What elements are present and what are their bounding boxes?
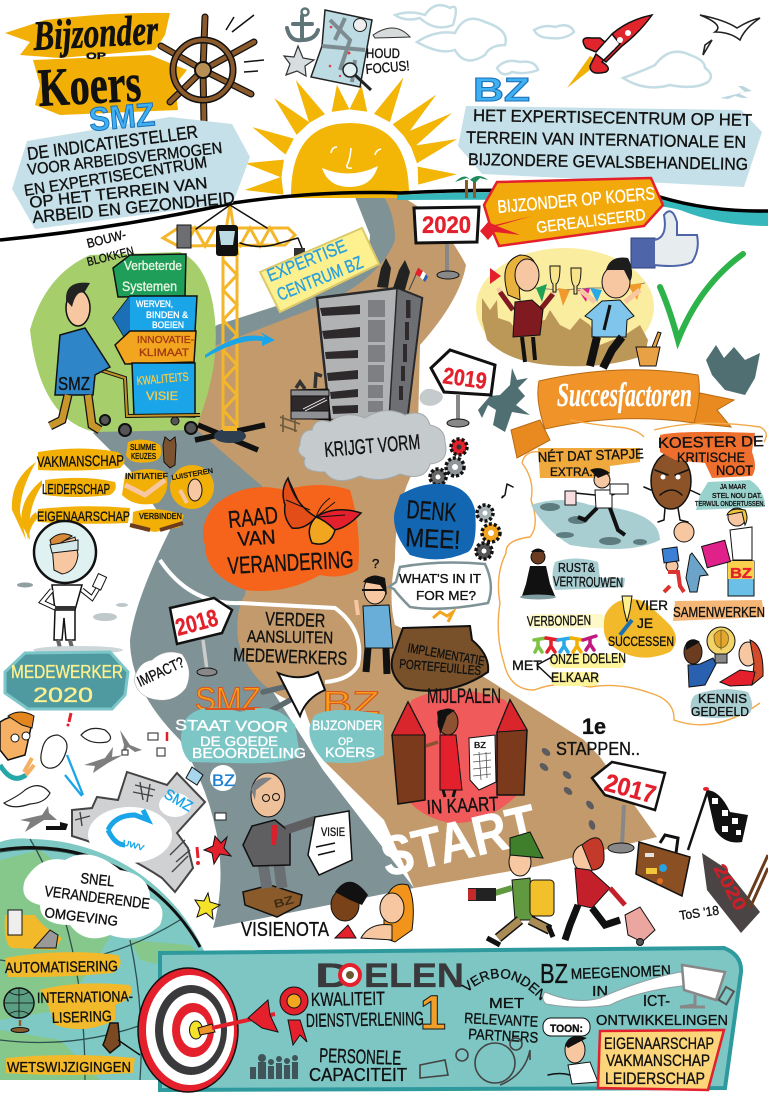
icon: computer bbox=[680, 965, 734, 1007]
yellow pill: leiderschap bbox=[42, 478, 116, 498]
milestone towers bbox=[392, 700, 527, 804]
icon: ship wheel bbox=[161, 15, 264, 123]
icon: gears top bbox=[430, 439, 467, 485]
pill: automatisering bbox=[5, 910, 121, 977]
panel: SMZ statement: STAAT VOOR bbox=[175, 717, 288, 736]
samenwerken figures: BZ bbox=[730, 565, 752, 582]
icon: butterfly bbox=[283, 478, 361, 544]
brown road bbox=[195, 196, 657, 888]
goal: kwaliteit dienstverlening bbox=[306, 989, 424, 1032]
man with cart: SMZ bbox=[58, 374, 90, 394]
bubble: whats in it for me: WHAT'S IN IT bbox=[399, 571, 481, 586]
blob: raad van verandering: RAAD bbox=[227, 502, 279, 534]
icon: suitcase bbox=[636, 835, 690, 896]
icon: checkered flag bbox=[688, 787, 748, 850]
block: werven binden boeien: BINDEN & bbox=[146, 310, 188, 320]
crowd in party bbox=[482, 298, 648, 366]
heading: mijlpalen: MIJLPALEN bbox=[427, 685, 501, 708]
blob: raad van verandering: VERANDERING bbox=[227, 546, 354, 580]
blob: raad van verandering bbox=[203, 478, 361, 591]
mijlpalen circle bbox=[394, 690, 524, 823]
block: kwaliteitsvisie bbox=[132, 363, 195, 417]
small cloud near 2019 bbox=[420, 389, 443, 406]
text: 1e stappen: 1e bbox=[582, 714, 606, 739]
visie man: BZ bbox=[273, 894, 295, 911]
panel: SMZ description: EN EXPERTISECENTRUM bbox=[23, 154, 208, 200]
hiker with camera bbox=[468, 832, 554, 945]
grey road bbox=[93, 197, 414, 928]
text: met onze doelen elkaar bbox=[512, 650, 626, 686]
block: kwaliteitsvisie: VISIE bbox=[146, 389, 178, 403]
cloud: krijgt vorm bbox=[298, 411, 446, 481]
panel: BZ description: BIJZONDERE GEVALSBEHANDELING bbox=[468, 150, 748, 174]
icon: thumbs up bbox=[631, 211, 698, 268]
yellow pill: leiderschap: LEIDERSCHAP bbox=[42, 481, 110, 498]
pill: automatisering: AUTOMATISERING bbox=[5, 958, 118, 977]
blob: denk mee: MEE! bbox=[405, 522, 461, 555]
walnut character bbox=[644, 453, 705, 522]
blob: slimme keuzes bbox=[126, 440, 161, 463]
signature: ToS '18 bbox=[678, 903, 720, 923]
arrow: to 2020 bbox=[480, 216, 532, 240]
block: kwaliteitsvisie: KWALITEITS bbox=[136, 370, 189, 388]
icon: gavel bbox=[103, 1023, 140, 1055]
icon: captain hat bbox=[373, 28, 410, 38]
panel: BZ description: HET EXPERTISECENTRUM OP HET bbox=[473, 106, 752, 130]
sign: expertise centrum bz bbox=[260, 228, 379, 312]
woman with calendar bbox=[426, 709, 496, 797]
sign: 2017 bbox=[592, 762, 665, 853]
success factor: rust en vertrouwen: VERTROUWEN bbox=[553, 573, 623, 590]
goal: BZ meegenomen in ict bbox=[540, 958, 728, 1029]
samenwerken figures bbox=[662, 508, 754, 596]
text: houd focus: HOUD bbox=[366, 45, 400, 61]
yellow arrows bbox=[12, 462, 42, 540]
panel: SMZ statement: BEOORDELING bbox=[192, 745, 306, 762]
success factor: net dat stapje extra bbox=[538, 445, 644, 479]
icon: palm trees bbox=[455, 176, 488, 198]
blob: verbinden bbox=[130, 509, 184, 532]
success factor: koester de kritische noot bbox=[658, 432, 764, 478]
UWV buildings bbox=[46, 767, 205, 892]
small clouds and planes bbox=[4, 728, 226, 865]
banner: bijzonder op koers gerealiseerd: BIJZONDER OP KOERS bbox=[497, 183, 656, 217]
goal: verbonden met relevante partners: VERBONDEN bbox=[461, 968, 543, 1000]
white hand arm bbox=[543, 972, 690, 1007]
crowd silhouette right bbox=[706, 345, 760, 395]
sign: 2020: 2020 bbox=[422, 212, 471, 239]
panel: SMZ statement: DE GOEDE bbox=[200, 733, 278, 749]
block: werven binden boeien bbox=[113, 296, 197, 338]
block: innovatieklimaat: INNOVATIE- bbox=[137, 335, 194, 346]
globe bbox=[0, 838, 205, 1080]
icon: people silhouettes bbox=[250, 1054, 298, 1079]
text: met onze doelen elkaar: MET bbox=[512, 657, 542, 673]
badge: BZ blue bbox=[210, 765, 236, 791]
icon: plug bbox=[263, 672, 325, 716]
man with glass bbox=[571, 258, 640, 368]
callout: ja maar: STEL NOU DAT. bbox=[712, 493, 762, 500]
heading: SMZ orange: SMZ bbox=[195, 681, 261, 717]
number 1: 1 bbox=[420, 987, 446, 1040]
banner: succesfactoren: Succesfactoren bbox=[557, 377, 692, 414]
panel: BZ description: TERREIN VAN INTERNATIONALE EN bbox=[466, 128, 746, 152]
white cord bbox=[160, 560, 359, 682]
cloud: snel veranderende omgeving bbox=[23, 854, 162, 938]
success factor: verbonden: VERBONDEN bbox=[527, 612, 591, 629]
blob: initiatief bbox=[122, 469, 168, 504]
sign: 2018: 2018 bbox=[173, 605, 221, 642]
icon: signpost 2020: 2020 bbox=[709, 860, 751, 914]
block: innovatieklimaat bbox=[115, 331, 196, 364]
horizon line bbox=[0, 190, 768, 240]
icon: check mark bbox=[660, 254, 743, 340]
success factor: kennis gedeeld bbox=[691, 689, 752, 719]
footprints bbox=[538, 746, 597, 831]
bag: implementatie portefeuilles: IMPLEMENTATIE bbox=[406, 640, 486, 669]
icon: gears bottom bbox=[476, 484, 513, 559]
yellow pill: eigenaarschap: EIGENAARSCHAP bbox=[37, 508, 130, 524]
icon: rocket bbox=[567, 15, 652, 88]
icon: anchor bbox=[287, 8, 318, 40]
clouds bbox=[395, 5, 711, 87]
building blocks bbox=[113, 254, 197, 417]
success factor: vier je successen: JE bbox=[637, 615, 653, 631]
text: bouwblokken bbox=[85, 227, 135, 269]
sign: 2017: 2017 bbox=[601, 769, 659, 809]
sign: 2018 bbox=[170, 598, 232, 676]
success factor: rust en vertrouwen bbox=[552, 558, 625, 590]
goal: kwaliteit dienstverlening: DIENSTVERLENING bbox=[306, 1009, 424, 1032]
text: visienota: VISIENOTA bbox=[241, 919, 330, 941]
panel: SMZ description: ARBEID EN GEZONDHEID bbox=[32, 188, 235, 227]
title text: Koers: Koers bbox=[36, 53, 142, 118]
text: met onze doelen elkaar: ONZE DOELEN bbox=[550, 650, 626, 667]
champagne bucket bbox=[636, 332, 661, 366]
bubble: whats in it for me: FOR ME? bbox=[416, 588, 476, 603]
panel: SMZ description: DE INDICATIESTELLER bbox=[26, 122, 199, 164]
goal: verbonden met relevante partners bbox=[461, 968, 543, 1047]
blob: denk mee: DENK bbox=[406, 494, 458, 528]
UWV buildings: SMZ bbox=[161, 786, 195, 815]
icon: seagull bbox=[700, 15, 760, 55]
cart bbox=[100, 370, 200, 436]
panel: doelen bbox=[137, 946, 744, 1093]
bubble: whats in it for me bbox=[389, 563, 491, 609]
bag: implementatie portefeuilles bbox=[392, 612, 488, 691]
astronaut bbox=[17, 521, 128, 654]
blob: luisteren bbox=[170, 465, 214, 509]
sea bbox=[397, 192, 768, 226]
bag: implementatie portefeuilles: PORTEFEUILLES bbox=[399, 656, 482, 678]
knowledge sharing figures bbox=[684, 639, 763, 687]
title text: Bijzonder: Bijzonder bbox=[31, 7, 160, 60]
bubble: impact bbox=[134, 652, 189, 700]
success factor: vier je successen: VIER bbox=[636, 597, 668, 613]
success factor: koester de kritische noot: NOOT bbox=[716, 462, 753, 478]
blonde woman bbox=[361, 884, 413, 942]
girl with dreadlocks bbox=[331, 882, 368, 938]
text: verder aansluiten medewerkers: VERDER bbox=[265, 609, 326, 632]
pill: internationalisering: LISERING bbox=[52, 1008, 112, 1027]
bubble: toon: TOON: bbox=[550, 1023, 583, 1035]
text: 1e stappen bbox=[556, 714, 640, 759]
blob: verbinden: VERBINDEN bbox=[139, 512, 182, 521]
arrow: blue bbox=[205, 332, 275, 358]
panel: BZ statement bbox=[309, 710, 384, 763]
block: verbeterde systemen: Verbeterde bbox=[124, 258, 182, 273]
icon: map and magnifier bbox=[311, 10, 372, 90]
icon: small globe bbox=[4, 988, 34, 1032]
sign: 2019 bbox=[431, 350, 495, 427]
yellow pill: vakmanschap bbox=[37, 448, 125, 471]
bubble: toon bbox=[543, 1018, 590, 1036]
heading: BZ: BZ bbox=[473, 71, 530, 108]
blob: denk mee bbox=[394, 484, 476, 559]
callout: ja maar: JA MAAR bbox=[720, 484, 746, 491]
blob: luisteren: LUISTEREN bbox=[171, 468, 214, 482]
woman with glass bbox=[498, 255, 560, 362]
pill: internationalisering bbox=[37, 983, 133, 1029]
text: verder aansluiten medewerkers: MEDEWERKERS bbox=[233, 645, 347, 670]
cloud: snel veranderende omgeving: SNEL bbox=[80, 870, 115, 891]
man thinking with glasses bbox=[356, 556, 393, 674]
block: werven binden boeien: WERVEN, bbox=[136, 299, 173, 309]
man with cart bbox=[50, 283, 110, 430]
rosette bbox=[280, 987, 308, 1045]
text: 1e stappen: STAPPEN.. bbox=[556, 739, 640, 759]
success factor: net dat stapje extra: EXTRA.. bbox=[550, 465, 596, 479]
goal: personele capaciteit bbox=[309, 1045, 407, 1085]
icon: people around globe bbox=[420, 1038, 530, 1085]
goal: BZ meegenomen in ict: IN bbox=[592, 983, 608, 1000]
party scene bbox=[476, 248, 661, 368]
success factor: net dat stapje extra: NÉT DAT STAPJE bbox=[538, 445, 644, 465]
pill: internationalisering: INTERNATIONA- bbox=[37, 988, 133, 1007]
heading: doelen: ELEN bbox=[364, 957, 464, 995]
block: innovatieklimaat: KLIMAAT bbox=[139, 347, 189, 359]
sign: expertise centrum bz: EXPERTISE bbox=[264, 236, 349, 286]
success factor: kennis gedeeld: KENNIS bbox=[698, 691, 747, 706]
box: eigenaarschap vakmanschap leiderschap: LEIDERSCHAP bbox=[605, 1069, 705, 1088]
sign: 2019: 2019 bbox=[441, 362, 488, 394]
banner: bijzonder op koers gerealiseerd bbox=[484, 178, 663, 246]
goal: BZ meegenomen in ict: ONTWIKKELINGEN bbox=[596, 1012, 728, 1029]
yellow pill: vakmanschap: VAKMANSCHAP bbox=[37, 452, 124, 471]
success factor: koester de kritische noot: KOESTER DE bbox=[658, 433, 764, 452]
panel: SMZ statement bbox=[175, 708, 306, 763]
goal: personele capaciteit: PERSONELE bbox=[319, 1045, 402, 1070]
blob: slimme keuzes: KEUZES bbox=[131, 452, 156, 461]
star red bbox=[204, 836, 231, 864]
icon: starfish bbox=[284, 46, 314, 76]
icon: plane bbox=[720, 86, 752, 99]
green circle background bbox=[30, 252, 216, 432]
panel: BZ description bbox=[458, 106, 762, 187]
pond with stepping stones bbox=[531, 500, 660, 549]
man thinking with glasses: ? bbox=[372, 556, 379, 571]
success factor: vier je successen: SUCCESSEN bbox=[608, 633, 674, 649]
success factor: koester de kritische noot: KRITISCHE bbox=[677, 449, 745, 465]
banner: succesfactoren bbox=[511, 370, 734, 458]
icon: owl bbox=[163, 437, 176, 468]
sign: 2020 bbox=[414, 207, 479, 279]
box: eigenaarschap vakmanschap leiderschap: VAKMANSCHAP bbox=[606, 1051, 710, 1070]
text: bouwblokken: BOUW- bbox=[85, 227, 128, 251]
panel: BZ statement: OP bbox=[338, 736, 353, 748]
panel: BZ statement: KOERS bbox=[325, 744, 375, 760]
figures and flag on roof bbox=[377, 258, 428, 290]
text: bouwblokken: BLOKKEN bbox=[85, 244, 135, 269]
title banner bbox=[5, 7, 187, 118]
building bbox=[280, 288, 422, 432]
goal: BZ meegenomen in ict: ICT- bbox=[643, 993, 670, 1010]
banner: bijzonder op koers gerealiseerd: GEREALISEERD bbox=[535, 207, 647, 237]
goal: BZ meegenomen in ict: BZ bbox=[540, 958, 568, 989]
cloud: snel veranderende omgeving: VERANDERENDE bbox=[44, 883, 151, 913]
crane bbox=[163, 205, 305, 450]
panel: medewerker 2020 bbox=[5, 652, 128, 709]
box: eigenaarschap vakmanschap leiderschap bbox=[598, 1030, 724, 1090]
text: verder aansluiten medewerkers bbox=[233, 609, 347, 670]
heading: doelen bbox=[315, 957, 464, 995]
UWV buildings: UWV bbox=[121, 838, 146, 853]
block: verbeterde systemen bbox=[113, 254, 186, 297]
sign: expertise centrum bz: CENTRUM BZ bbox=[274, 252, 366, 305]
scared man bbox=[0, 712, 71, 778]
goal: personele capaciteit: CAPACITEIT bbox=[309, 1065, 407, 1085]
goal: verbonden met relevante partners: MET bbox=[489, 995, 524, 1012]
heading: doelen: D bbox=[315, 957, 352, 995]
goal: verbonden met relevante partners: RELEVANTE bbox=[464, 1010, 539, 1031]
heading: SMZ: SMZ bbox=[87, 95, 156, 138]
outline: success cloud bbox=[498, 420, 766, 725]
meditating man bbox=[520, 548, 556, 600]
cloud: snel veranderende omgeving: OMGEVING bbox=[44, 904, 119, 929]
bubble: impact: IMPACT? bbox=[135, 654, 187, 691]
block: verbeterde systemen: Systemen bbox=[122, 278, 177, 294]
pill: wetswijzigingen: WETSWIJZIGINGEN bbox=[7, 1059, 131, 1076]
text: verder aansluiten medewerkers: AANSLUITEN bbox=[247, 627, 333, 648]
text: houd focus: FOCUS! bbox=[365, 57, 410, 77]
panel: SMZ description: VOOR ARBEIDSVERMOGEN bbox=[27, 140, 223, 179]
woman with calendar: BZ bbox=[474, 741, 486, 750]
target bbox=[138, 968, 238, 1092]
star yellow bbox=[195, 893, 220, 919]
visie man: VISIE bbox=[321, 825, 345, 839]
badge: BZ blue: BZ bbox=[212, 771, 235, 790]
visie man bbox=[243, 773, 352, 917]
callout: ja maar bbox=[695, 480, 765, 510]
block: werven binden boeien: BOEIEN bbox=[152, 320, 184, 330]
blob: raad van verandering: VAN bbox=[237, 526, 276, 551]
text: in kaart: IN KAART bbox=[426, 793, 499, 819]
running woman with papers bbox=[565, 468, 628, 535]
panel: SMZ description: OP HET TERREIN VAN bbox=[29, 175, 208, 212]
woman with trolley bbox=[565, 838, 655, 946]
dart bbox=[198, 1000, 278, 1035]
panel: BZ statement: BIJZONDER bbox=[312, 717, 382, 733]
crowd silhouette left bbox=[478, 368, 530, 432]
goal: verbonden met relevante partners: PARTNERS bbox=[468, 1026, 539, 1047]
title text: op: OP bbox=[86, 51, 106, 61]
paper chain people bbox=[534, 636, 596, 652]
heading: BZ orange: BZ bbox=[322, 685, 380, 721]
icon: signpost 2020 bbox=[702, 853, 768, 933]
man presenting bbox=[548, 1036, 598, 1084]
success factor: rust en vertrouwen: RUST& bbox=[558, 560, 595, 575]
panel: medewerker 2020: MEDEWERKER bbox=[11, 662, 123, 682]
panel: SMZ description bbox=[12, 117, 250, 229]
cloud: krijgt vorm: KRIJGT VORM bbox=[323, 431, 421, 462]
success factor: vier je successen bbox=[604, 596, 676, 658]
blob: slimme keuzes: SLIMME bbox=[130, 443, 156, 452]
text: met onze doelen elkaar: ELKAAR bbox=[551, 669, 599, 685]
sun bbox=[244, 73, 460, 199]
text: houd focus bbox=[365, 45, 410, 77]
panel: medewerker 2020: 2020 bbox=[33, 684, 93, 707]
blob: initiatief: INITIATIEF bbox=[125, 472, 168, 481]
box: eigenaarschap vakmanschap leiderschap: EIGENAARSCHAP bbox=[604, 1034, 714, 1053]
goal: kwaliteit dienstverlening: KWALITEIT bbox=[311, 989, 385, 1011]
icon: light bulb bbox=[707, 627, 735, 663]
text: START: START bbox=[375, 792, 543, 889]
goal: BZ meegenomen in ict: MEEGENOMEN bbox=[571, 963, 671, 983]
success factor: kennis gedeeld: GEDEELD bbox=[691, 704, 749, 719]
